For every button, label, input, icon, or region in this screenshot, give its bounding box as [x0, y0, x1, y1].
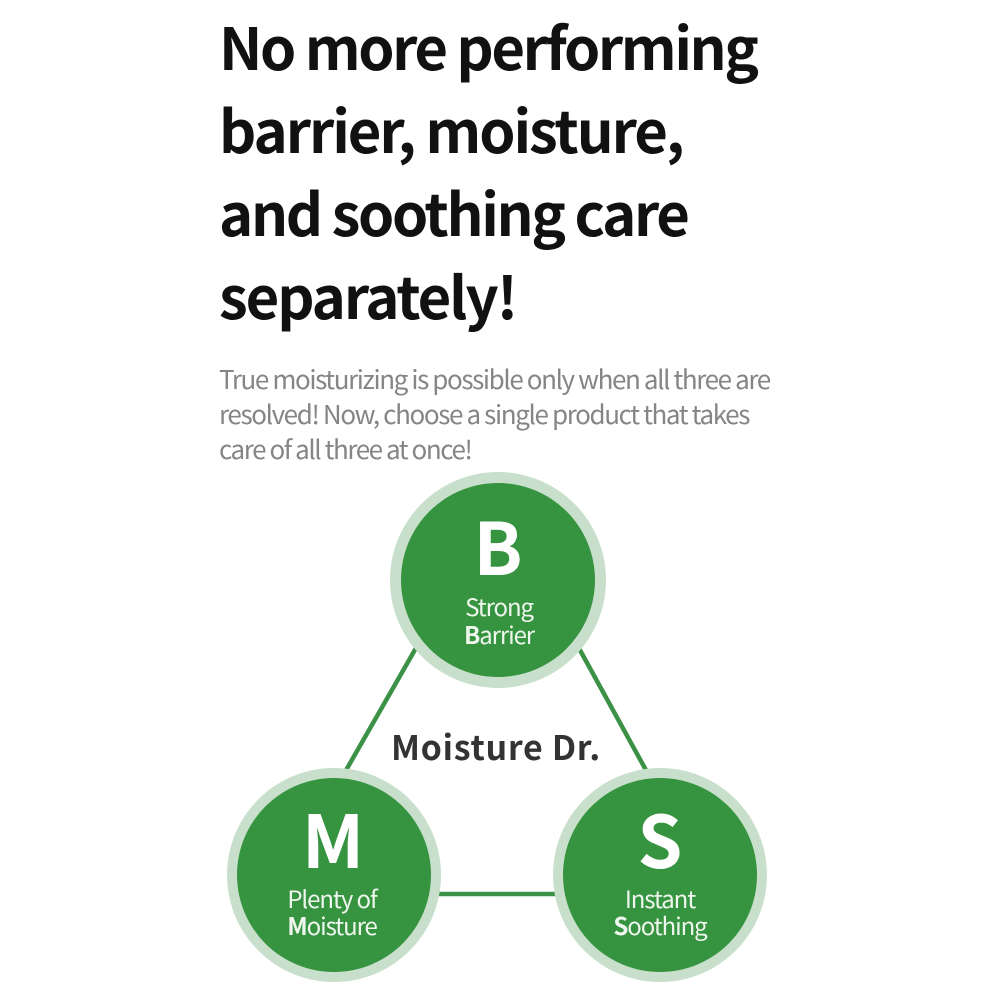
circle B: Strong Barrier: Strong — [465, 588, 534, 623]
circle M: Plenty of Moisture: Plenty of — [287, 880, 379, 915]
circle S: Instant Soothing — [553, 768, 767, 982]
title — [219, 3, 758, 336]
subtitle text: resolved! Now, choose a single product that takes — [219, 395, 749, 432]
circle B: Strong Barrier: B — [473, 491, 523, 596]
circle S: Instant Soothing: Instant — [625, 880, 696, 915]
circle M: Plenty of Moisture: M — [302, 784, 364, 890]
subtitle text: care of all three at once! — [219, 430, 471, 467]
circle B: Strong Barrier — [390, 472, 606, 688]
circle B: Strong Barrier: Barrier — [464, 616, 536, 651]
title: No more performing — [219, 3, 757, 87]
circle S: Instant Soothing: Soothing — [613, 907, 708, 942]
subtitle text — [219, 360, 770, 467]
subtitle text: True moisturizing is possible only when all three are — [219, 360, 770, 397]
connecting lines — [345, 641, 647, 894]
circle S: Instant Soothing: S — [638, 784, 682, 889]
circle M: Plenty of Moisture — [227, 768, 441, 982]
title: separately! — [219, 252, 516, 336]
title: and soothing care — [219, 169, 688, 253]
circle M: Plenty of Moisture: Moisture — [287, 907, 378, 942]
center label: Moisture Dr. — [391, 721, 601, 770]
title: barrier, moisture, — [219, 86, 683, 170]
